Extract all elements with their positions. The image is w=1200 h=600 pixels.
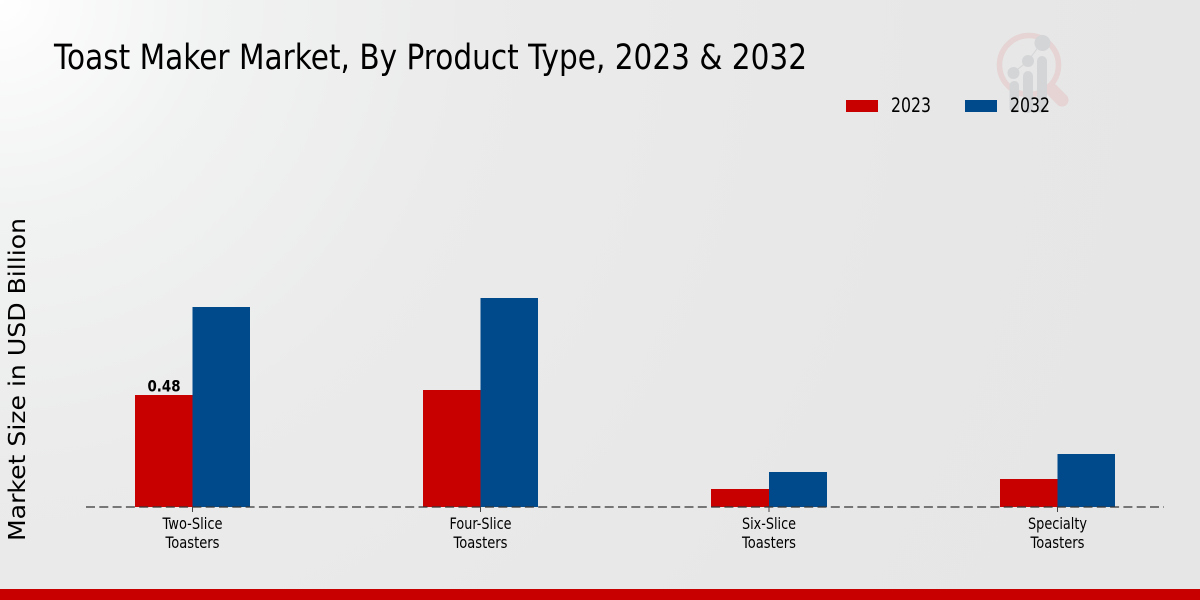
label: Specialty Toasters: Specialty — [1028, 514, 1087, 533]
legend — [846, 94, 1050, 117]
icon: watermark logo — [1000, 35, 1062, 113]
bar chart — [86, 298, 1164, 512]
data label: 0.48 — [148, 376, 180, 396]
bottom red band — [0, 589, 1200, 600]
legend: 2032 swatch — [965, 100, 997, 112]
label: Two-Slice Toasters: Two-Slice — [162, 514, 222, 533]
label: Six-Slice Toasters: Toasters — [741, 533, 796, 552]
label: Specialty Toasters — [1028, 514, 1087, 552]
label: Specialty Toasters: Toasters — [1030, 533, 1084, 552]
bars: Two-Slice Toasters — [135, 307, 250, 507]
x axis labels — [162, 514, 1087, 552]
label: Four-Slice Toasters: Toasters — [453, 533, 508, 552]
label: Four-Slice Toasters: Four-Slice — [450, 514, 512, 533]
label: Two-Slice Toasters — [162, 514, 222, 552]
bars: Specialty Toasters — [1000, 454, 1115, 507]
y axis title: Market Size in USD Billion — [3, 218, 31, 541]
bars: Four-Slice Toasters — [423, 298, 538, 507]
label: Two-Slice Toasters: Toasters — [165, 533, 220, 552]
legend: 2023 swatch — [846, 100, 878, 112]
legend: 2023 label: 2023 — [891, 94, 931, 117]
label: Four-Slice Toasters — [450, 514, 512, 552]
title: Toast Maker Market, By Product Type, 2023 & 2032 — [53, 38, 807, 78]
bars: Six-Slice Toasters — [711, 472, 827, 507]
legend: 2032 label: 2032 — [1010, 94, 1050, 117]
x axis baseline — [86, 506, 1164, 508]
label: Six-Slice Toasters: Six-Slice — [742, 514, 796, 533]
label: Six-Slice Toasters — [741, 514, 796, 552]
